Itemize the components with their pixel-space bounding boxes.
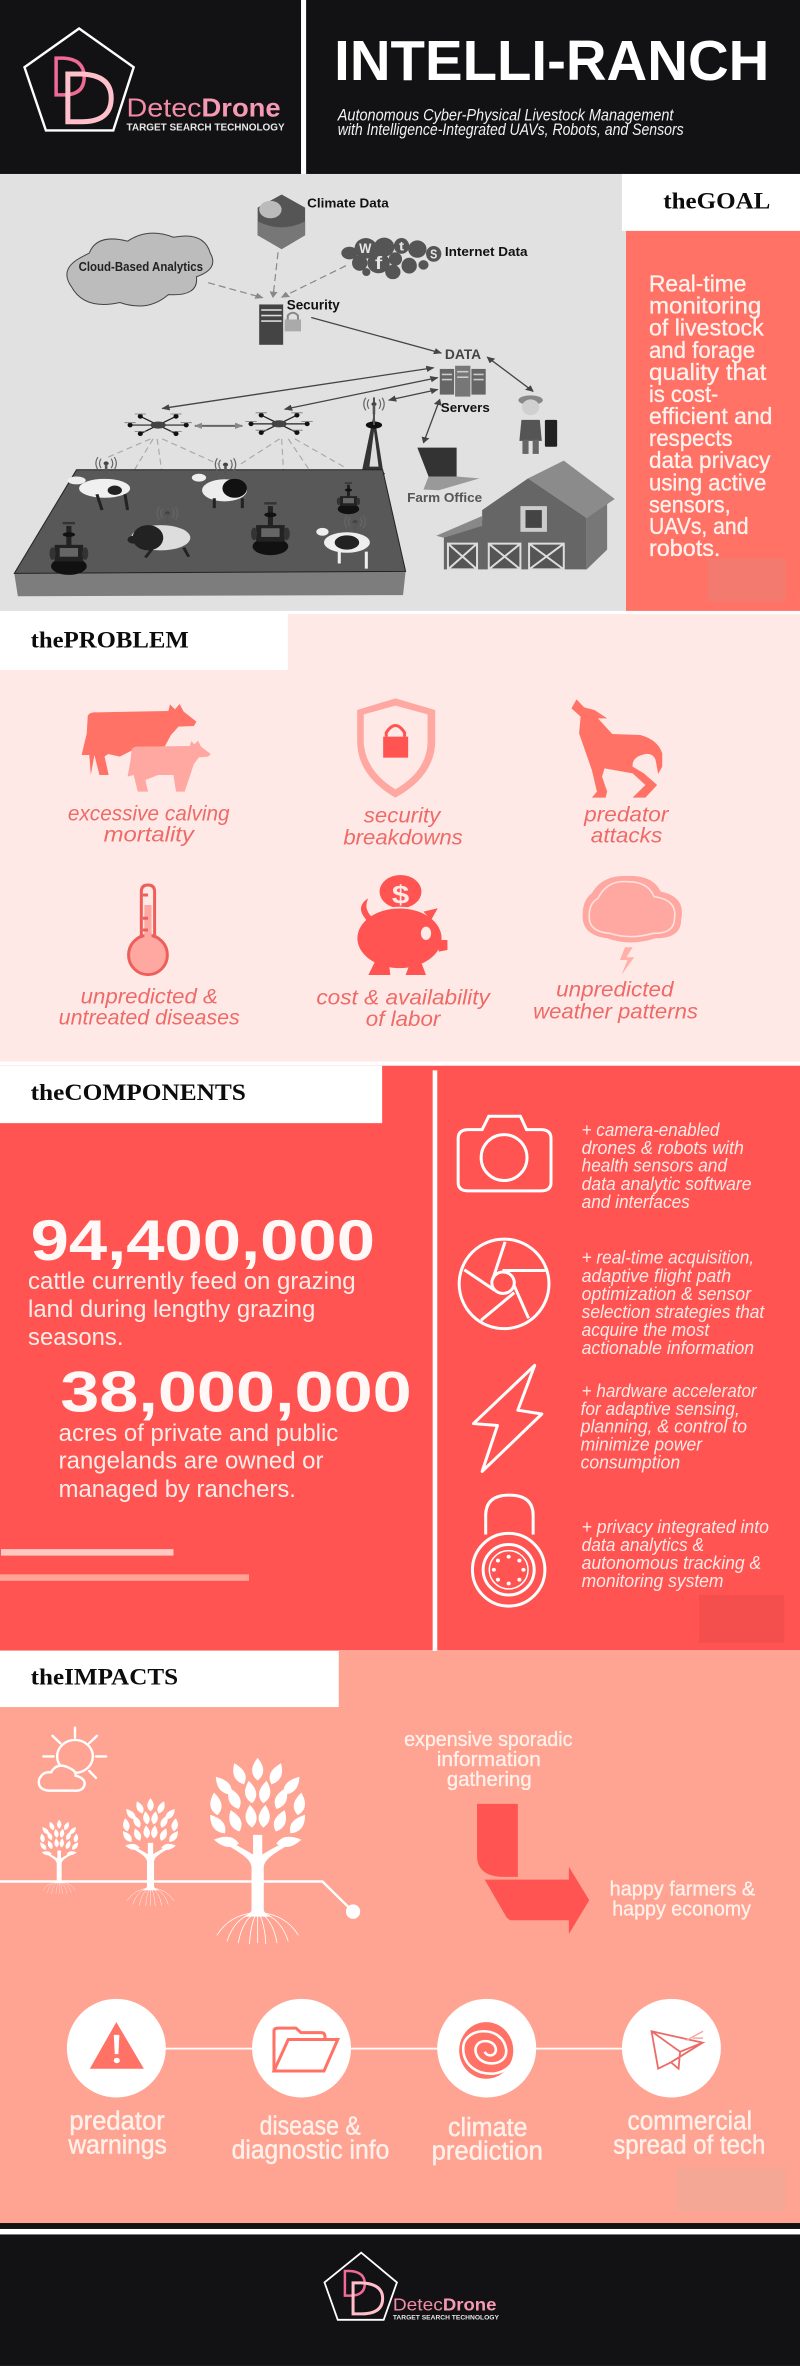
icon: cows and robots on field [49,457,370,575]
icon: farm office laptop: Farm Office [407,491,482,506]
logo: DetecDrone: Drone [202,94,281,123]
logo: DetecDrone [24,28,285,133]
label: unpredicted weather patterns: weather patterns [533,999,698,1023]
field [14,470,406,596]
connector line [163,2048,625,2050]
label: disease and diagnostic info [232,2111,389,2164]
goal text: UAVs, and [649,513,748,539]
icon: internet data social cluster: t [399,240,404,254]
label: predator warnings: predator [69,2106,165,2135]
footer logo: Drone [443,2295,496,2314]
icon: drones [124,413,313,436]
icon: internet data social cluster: Internet Data [445,245,528,260]
icon: lightning bolt [473,1365,542,1471]
icon: radio tower [360,397,385,477]
panel: system diagram [0,174,626,611]
logo: DetecDrone: TARGET SEARCH TECHNOLOGY [127,123,285,133]
label: predator warnings: warnings [67,2130,167,2159]
label: commercial spread of tech: spread of tech [613,2130,765,2159]
label: disease and diagnostic info: disease & [260,2111,361,2140]
text: privacy integrated: monitoring system [582,1570,723,1591]
text: camera-enabled drones: + camera-enabled [582,1119,720,1140]
label: excessive calving mortality: mortality [104,822,196,846]
text: hardware accelerator: minimize power [581,1434,703,1455]
panel: problem [0,614,800,1062]
diagram arrows [102,252,533,524]
icon: paper plane in circle [622,1999,721,2097]
subtitle [337,107,684,140]
label: climate prediction: prediction [432,2136,543,2165]
text: happy farmers and economy [610,1877,756,1920]
statistic: acres: managed by ranchers. [59,1476,296,1503]
icon: combination lock [472,1495,545,1606]
heading: the impacts: theIMPACTS [31,1665,178,1690]
label: security breakdowns [343,803,463,849]
icon: sun and cloud [39,1728,106,1791]
footer logo [324,2253,499,2321]
icon: security server with lock: Security [287,298,340,313]
icon: growing trees [38,1758,310,1944]
statistic: acres: 38,000,000 [60,1360,412,1424]
goal text: Real-time [649,271,746,297]
arrow: turn right [477,1804,589,1934]
icon: internet data social cluster: W [359,241,372,257]
label: commercial spread of tech: commercial [628,2106,752,2135]
icon: internet data social cluster: S [430,248,437,262]
footer logo: Detec [393,2295,443,2314]
text: expensive sporadic information gathering: information [437,1747,541,1771]
text: camera-enabled drones: health sensors and [582,1155,728,1176]
icon: piggy bank [356,875,447,975]
heading: the goal: theGOAL [663,188,770,214]
icon: aperture [459,1239,549,1329]
label: unpredicted and untreated diseases [59,984,240,1029]
text: camera-enabled drones [582,1119,752,1212]
icon: analytics cloud [67,233,213,306]
goal text: is cost- [649,381,718,407]
goal text: of livestock [649,315,764,341]
statistic: cattle: seasons. [28,1324,123,1351]
goal text: sensors, [649,492,731,518]
statistic: acres: rangelands are owned or [59,1448,324,1475]
label: predator attacks: predator [583,802,670,826]
icon: camera [458,1116,551,1191]
statistic: cattle [28,1209,375,1351]
label: unpredicted weather patterns [533,977,698,1023]
label: predator warnings [67,2106,167,2159]
text: expensive sporadic information gathering [404,1727,573,1791]
label: security breakdowns: security [364,803,442,827]
label: unpredicted and untreated diseases: unpredicted & [81,984,218,1008]
icon: analytics cloud: Cloud-Based Analytics [79,261,203,275]
icon: security shield [357,698,435,798]
icon: farmer with phone [518,395,557,454]
icon: warning triangle in circle [67,1999,166,2097]
icon: climate globe [258,195,389,249]
text: hardware accelerator [580,1380,757,1473]
goal text: and forage [649,337,755,363]
text: camera-enabled drones: drones & robots with [582,1137,744,1158]
icon: data servers: DATA [445,348,481,362]
label: predator attacks: attacks [591,823,662,847]
statistic: cattle: 94,400,000 [31,1209,375,1272]
label: climate prediction: climate [448,2112,528,2141]
page header band [0,0,800,174]
footer logo: TARGET SEARCH TECHNOLOGY [393,2315,499,2321]
panel: impacts [0,1651,800,2223]
text: expensive sporadic information gathering: expensive sporadic [404,1727,573,1751]
heading: the components: theCOMPONENTS [31,1080,246,1105]
label: commercial spread of tech [613,2106,765,2159]
statistic: cattle: land during lengthy grazing [28,1296,315,1323]
text: real-time acquisition [582,1247,765,1358]
label: excessive calving mortality: excessive calving [68,801,230,825]
label: unpredicted and untreated diseases: untreated diseases [59,1005,240,1029]
heading: the problem: thePROBLEM [31,628,189,653]
icon: data servers [440,348,490,415]
panel: components [0,1066,800,1651]
goal text: quality that [649,359,767,385]
label: excessive calving mortality [68,801,230,846]
panel: goal [622,174,800,611]
goal text: robots. [649,535,720,561]
icon: internet data social cluster [341,238,528,279]
logo: DetecDrone: Detec [127,94,202,123]
icon: farm office laptop [407,448,482,506]
icon: howling wolf [571,699,662,798]
text: real-time acquisition: acquire the most [582,1319,710,1340]
label: unpredicted weather patterns: unpredicted [556,977,675,1001]
label: security breakdowns: breakdowns [343,825,463,849]
text: hardware accelerator: consumption [581,1452,680,1473]
icon: internet data social cluster: f [375,254,382,273]
icon: climate globe: Climate Data [307,196,389,211]
label: predator attacks [583,802,670,847]
goal text: respects [649,425,733,451]
icon: thermometer [129,885,167,975]
ground line [0,1881,353,1912]
icon: storm cloud [583,876,682,975]
icon: piggy bank: $ [392,881,409,909]
label: cost and availability of labor: of labor [366,1007,442,1031]
text: happy farmers and economy: happy farmers & [610,1877,756,1900]
text: camera-enabled drones: and interfaces [582,1191,690,1212]
statistic: acres [59,1360,412,1503]
text: privacy integrated: data analytics & [582,1534,704,1555]
text: privacy integrated [582,1516,769,1591]
text: real-time acquisition: adaptive flight path [582,1265,731,1286]
goal text [649,271,772,561]
footer band [0,2223,800,2366]
label: cost and availability of labor [316,985,492,1031]
icon: cows [82,704,211,792]
icon: folder in circle [252,1999,351,2097]
label: climate prediction [432,2112,543,2165]
label: disease and diagnostic info: diagnostic info [232,2135,389,2164]
text: expensive sporadic information gathering: gathering [447,1767,532,1791]
icon: barn [436,461,615,569]
statistic: acres: acres of private and public [59,1420,338,1447]
icon: spiral in circle [437,1999,536,2097]
text: happy farmers and economy: happy economy [612,1897,751,1920]
label: cost and availability of labor: cost & availability [316,985,492,1009]
statistic: cattle: cattle currently feed on grazing [28,1268,356,1295]
icon: data servers: Servers [441,401,490,415]
goal text: monitoring [649,293,761,319]
text: hardware accelerator: for adaptive sensing, [581,1398,740,1419]
icon: security server with lock [259,298,340,345]
